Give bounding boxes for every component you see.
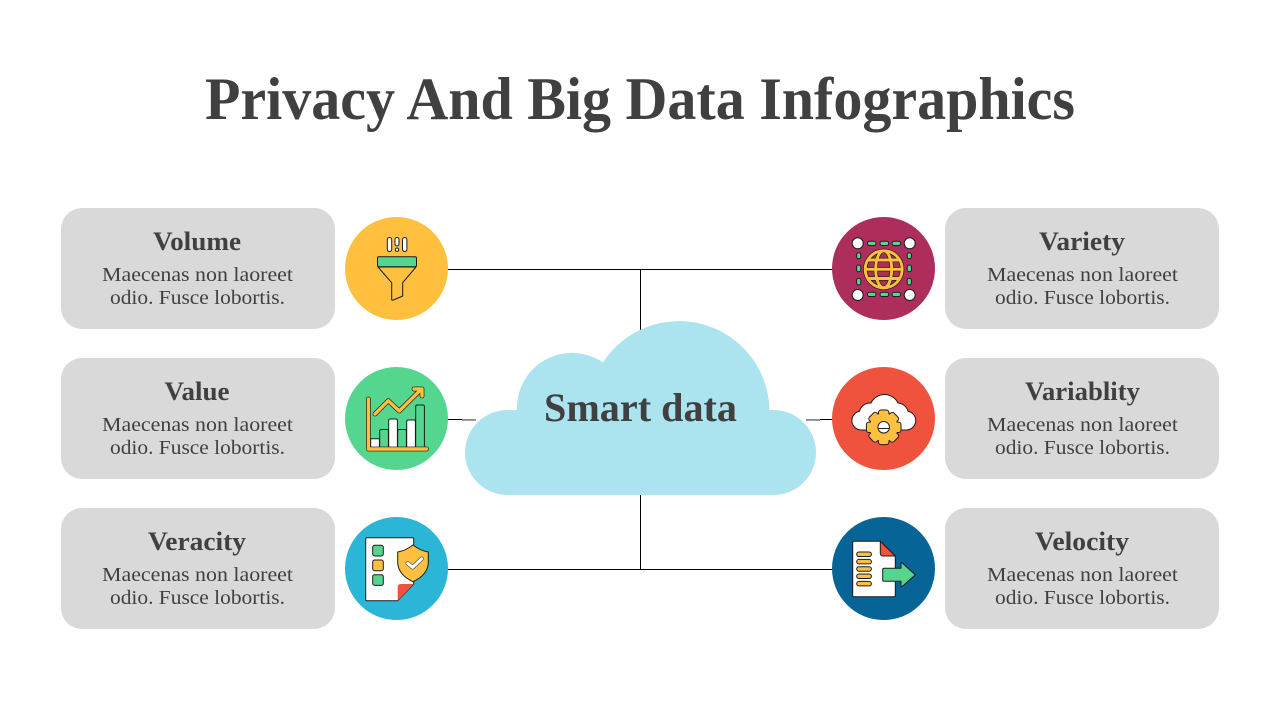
- text: volume description: [102, 264, 293, 309]
- panel: variablity: [945, 358, 1219, 479]
- connector lines: [448, 269, 832, 570]
- title: Privacy And Big Data Infographics: [205, 66, 1075, 132]
- icon: document with shield: [345, 517, 448, 620]
- text: value description: odio. Fusce lobortis.: [110, 437, 285, 459]
- text: veracity description: [102, 564, 293, 609]
- text: volume description: odio. Fusce lobortis.: [110, 287, 285, 309]
- panel: veracity: [61, 508, 335, 629]
- heading: volume: Volume: [153, 227, 241, 256]
- text: value description: [102, 414, 293, 459]
- cloud label: Smart data: [544, 385, 737, 430]
- icon: globe in selection frame: [832, 217, 935, 320]
- text: veracity description: Maecenas non laoreet: [102, 564, 293, 586]
- heading: veracity: Veracity: [148, 527, 246, 556]
- text: variablity description: odio. Fusce lobortis.: [995, 437, 1170, 459]
- panel: velocity: [945, 508, 1219, 629]
- panel: variety: [945, 208, 1219, 329]
- text: variety description: [987, 264, 1178, 309]
- text: variablity description: Maecenas non laoreet: [987, 414, 1178, 436]
- heading: velocity: Velocity: [1035, 527, 1129, 556]
- heading: variablity: Variablity: [1025, 377, 1140, 406]
- text: variablity description: [987, 414, 1178, 459]
- text: variety description: odio. Fusce lobortis.: [995, 287, 1170, 309]
- text: velocity description: Maecenas non laoreet: [987, 564, 1178, 586]
- text: velocity description: odio. Fusce lobortis.: [995, 587, 1170, 609]
- text: veracity description: odio. Fusce lobortis.: [110, 587, 285, 609]
- text: value description: Maecenas non laoreet: [102, 414, 293, 436]
- icon: cloud with gear: [832, 367, 935, 470]
- central cloud: [465, 321, 816, 495]
- panel: value: [61, 358, 335, 479]
- text: volume description: Maecenas non laoreet: [102, 264, 293, 286]
- icon: growth chart: [345, 367, 448, 470]
- panel: volume: [61, 208, 335, 329]
- heading: variety: Variety: [1039, 227, 1125, 256]
- icon: funnel: [345, 217, 448, 320]
- icon: document with arrow: [832, 517, 935, 620]
- heading: value: Value: [164, 377, 230, 406]
- text: variety description: Maecenas non laoreet: [987, 264, 1178, 286]
- text: velocity description: [987, 564, 1178, 609]
